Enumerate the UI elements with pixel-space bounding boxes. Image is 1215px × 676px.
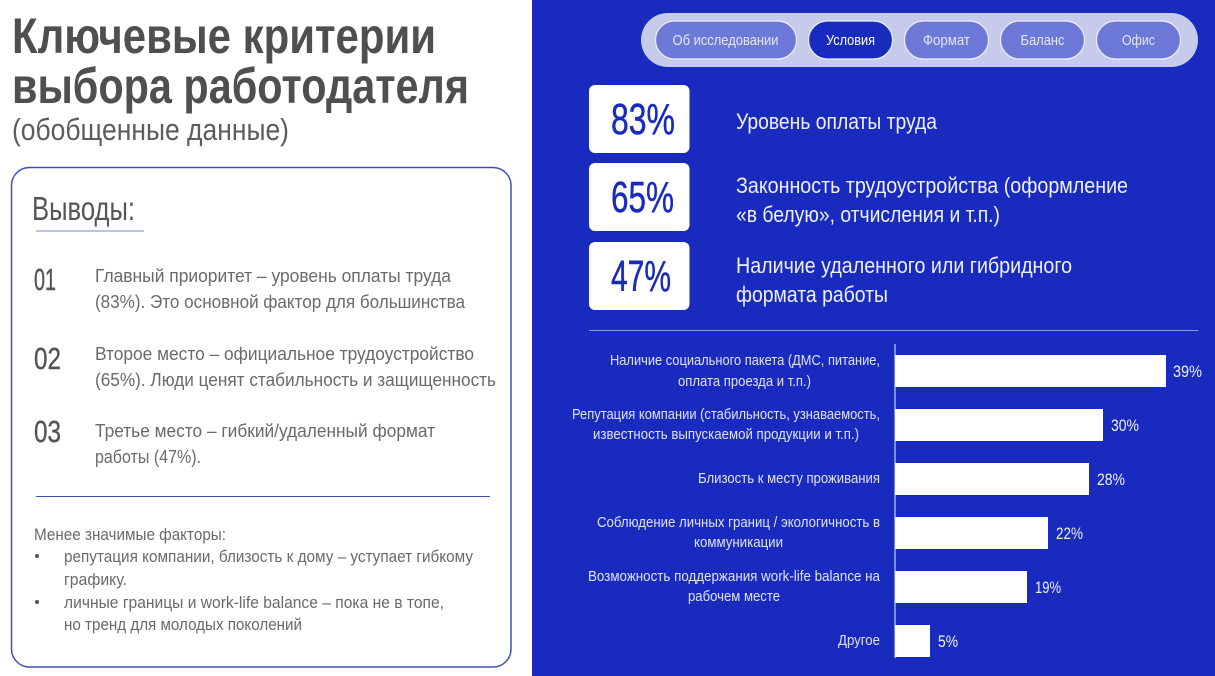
stat: 65%: Законность трудоустройства (оформление bbox=[736, 173, 1128, 198]
conclusion 01: Главный приоритет – уровень оплаты труда bbox=[95, 265, 452, 286]
bar: social package 39%: Наличие социального пакета (ДМС, питание, bbox=[610, 353, 880, 369]
bar: proximity 28% bbox=[698, 463, 1125, 495]
conclusion 02: Второе место – официальное трудоустройство bbox=[95, 343, 474, 364]
bar: reputation 30%: 30% bbox=[1111, 416, 1139, 435]
conclusion 02: (65%). Люди ценят стабильность и защищенность bbox=[95, 369, 496, 390]
stat: 83%: Уровень оплаты труда bbox=[736, 109, 937, 134]
text block: less significant factors: репутация компании, близость к дому – уступает гибкому bbox=[64, 548, 474, 566]
conclusion 01 bbox=[34, 262, 466, 312]
bar: personal boundaries 22% bbox=[597, 515, 1083, 551]
bar: reputation 30%: Репутация компании (стабильность, узнаваемость, bbox=[572, 407, 880, 423]
panel: blue results bbox=[532, 0, 1215, 676]
stat: 65%: «в белую», отчисления и т.п.) bbox=[736, 202, 1000, 227]
bar: personal boundaries 22%: коммуникации bbox=[694, 535, 783, 551]
stat: 65% bbox=[589, 163, 1128, 231]
navigation tabs: Условия bbox=[826, 32, 875, 49]
stat: 47%: 47% bbox=[611, 252, 671, 301]
stat: 83% bbox=[589, 85, 937, 153]
text block: less significant factors: Менее значимые факторы: bbox=[34, 526, 226, 544]
navigation tabs: Офис bbox=[1122, 32, 1155, 49]
conclusion 02: 02 bbox=[34, 341, 61, 376]
bar: social package 39%: оплата проезда и т.п.) bbox=[678, 374, 811, 390]
text block: less significant factors: графику. bbox=[64, 571, 127, 589]
bar: personal boundaries 22%: 22% bbox=[1056, 524, 1083, 543]
panel: conclusions bbox=[12, 168, 511, 667]
stat: 47%: Наличие удаленного или гибридного bbox=[736, 253, 1072, 278]
conclusion 03 bbox=[34, 414, 435, 467]
conclusion 03: Третье место – гибкий/удаленный формат bbox=[95, 420, 435, 441]
conclusion 01: (83%). Это основной фактор для большинства bbox=[95, 291, 466, 312]
bar: work-life balance 19%: 19% bbox=[1035, 578, 1061, 597]
stat: 65%: 65% bbox=[611, 173, 674, 222]
bar: social package 39% bbox=[610, 353, 1202, 390]
bar: other 5% bbox=[838, 625, 958, 657]
text block: less significant factors: личные границы и work-life balance – пока не в топе, bbox=[64, 594, 444, 612]
title: Ключевые критерии bbox=[12, 8, 436, 64]
bar: work-life balance 19% bbox=[588, 569, 1061, 605]
stat: 83%: 83% bbox=[611, 95, 675, 144]
bar: work-life balance 19%: Возможность поддержания work-life balance на bbox=[588, 569, 881, 585]
title: выбора работодателя bbox=[12, 58, 469, 114]
bar: reputation 30%: известность выпускаемой продукции и т.п.) bbox=[593, 427, 859, 443]
bar: proximity 28%: Близость к месту проживания bbox=[698, 471, 880, 487]
navigation tabs bbox=[641, 13, 1198, 67]
bar: proximity 28%: 28% bbox=[1097, 470, 1125, 489]
navigation tabs: Об исследовании bbox=[672, 32, 778, 49]
title bbox=[12, 8, 469, 147]
stat: 47% bbox=[589, 242, 1072, 310]
conclusion 01: 01 bbox=[34, 262, 56, 297]
bar: reputation 30% bbox=[572, 407, 1139, 443]
bar chart bbox=[572, 344, 1202, 658]
bar: work-life balance 19%: рабочем месте bbox=[688, 589, 780, 605]
bar: personal boundaries 22%: Соблюдение личных границ / экологичность в bbox=[597, 515, 880, 531]
heading: conclusions: Выводы: bbox=[32, 190, 135, 227]
navigation tabs: Формат bbox=[923, 32, 970, 49]
bar: social package 39%: 39% bbox=[1173, 362, 1202, 381]
text block: less significant factors: но тренд для молодых поколений bbox=[64, 616, 302, 634]
navigation tabs: Баланс bbox=[1020, 32, 1065, 49]
conclusion 02 bbox=[34, 341, 496, 390]
bar: other 5%: 5% bbox=[938, 632, 958, 651]
title: (обобщенные данные) bbox=[12, 112, 289, 147]
conclusion 03: работы (47%). bbox=[95, 446, 201, 467]
text block: less significant factors bbox=[34, 526, 474, 634]
bar: other 5%: Другое bbox=[838, 633, 880, 649]
conclusion 03: 03 bbox=[34, 414, 61, 449]
stat: 47%: формата работы bbox=[736, 282, 888, 307]
